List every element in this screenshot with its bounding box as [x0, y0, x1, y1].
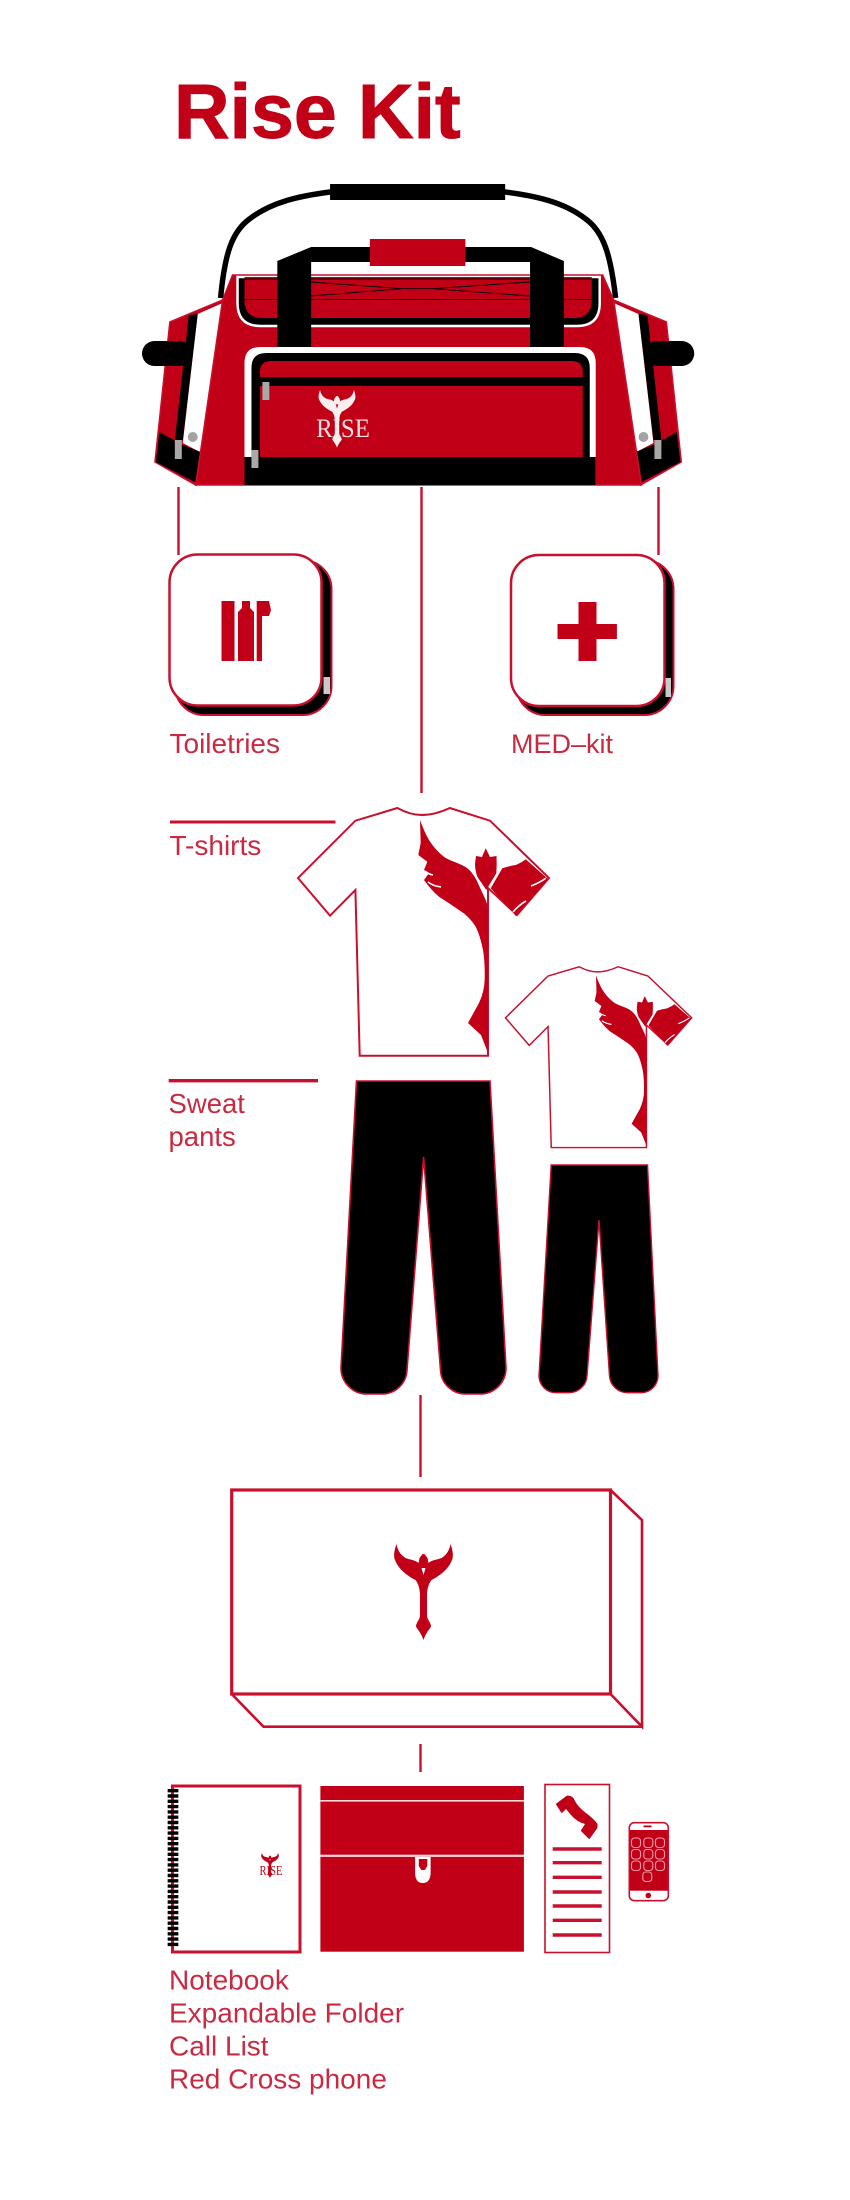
large sweat pants — [341, 1081, 506, 1394]
red cross phone — [629, 1823, 668, 1901]
notebook logo: RISE — [260, 1864, 282, 1879]
card shadow — [516, 560, 674, 715]
call list lines — [553, 1849, 602, 1935]
med-kit card — [511, 555, 674, 715]
large t-shirt — [298, 808, 549, 1056]
connector lines around box — [419, 1395, 422, 1772]
main bag body — [196, 275, 641, 485]
sweat pants rule and label: pants — [168, 1121, 236, 1152]
front pocket — [244, 347, 596, 485]
toiletries label: Toiletries — [170, 728, 280, 759]
inner carry handles — [277, 247, 564, 347]
bag top carry strap — [221, 184, 616, 298]
t-shirts rule and label — [170, 820, 336, 861]
call list — [545, 1784, 610, 1952]
document box — [232, 1490, 642, 1727]
icon: telephone handset — [556, 1796, 598, 1839]
icon: toiletry bottles — [222, 601, 271, 661]
box outline — [232, 1490, 642, 1727]
sweat pants rule and label — [168, 1079, 318, 1152]
connector lines from bag — [178, 487, 658, 793]
card clip — [324, 677, 330, 694]
folder clasp — [415, 1857, 431, 1883]
card face — [511, 555, 664, 706]
card clip — [666, 678, 671, 697]
title: Rise Kit — [174, 69, 461, 155]
handle tag — [370, 239, 465, 266]
right side pocket — [614, 300, 694, 485]
box phoenix logo — [394, 1544, 453, 1640]
notebook cover — [172, 1786, 300, 1952]
notebook spiral — [168, 1789, 178, 1948]
sweat pants rule and label: Sweat — [168, 1088, 245, 1119]
notebook — [172, 1786, 300, 1952]
bag RISE logo: RISE — [316, 414, 370, 443]
card face — [170, 554, 322, 706]
left side pocket — [142, 300, 223, 485]
t-shirts rule and label: T-shirts — [170, 830, 261, 861]
med-kit label: MED–kit — [511, 729, 614, 759]
contents list: Notebook — [169, 1964, 290, 1995]
bag RISE logo — [316, 390, 370, 448]
contents list: Call List — [169, 2030, 269, 2062]
duffel bag illustration — [142, 184, 694, 485]
card shadow — [175, 560, 332, 715]
contents list — [169, 1964, 404, 2094]
phone app icons — [632, 1838, 664, 1882]
contents list: Red Cross phone — [169, 2064, 387, 2094]
contents list: Expandable Folder — [169, 1998, 404, 2029]
expandable folder — [320, 1786, 524, 1952]
top zipper panel — [238, 277, 600, 326]
small t-shirt — [505, 967, 692, 1148]
icon: medical cross — [558, 602, 617, 661]
small sweat pants — [539, 1165, 658, 1393]
toiletries card — [170, 554, 332, 715]
notebook logo — [260, 1853, 282, 1879]
